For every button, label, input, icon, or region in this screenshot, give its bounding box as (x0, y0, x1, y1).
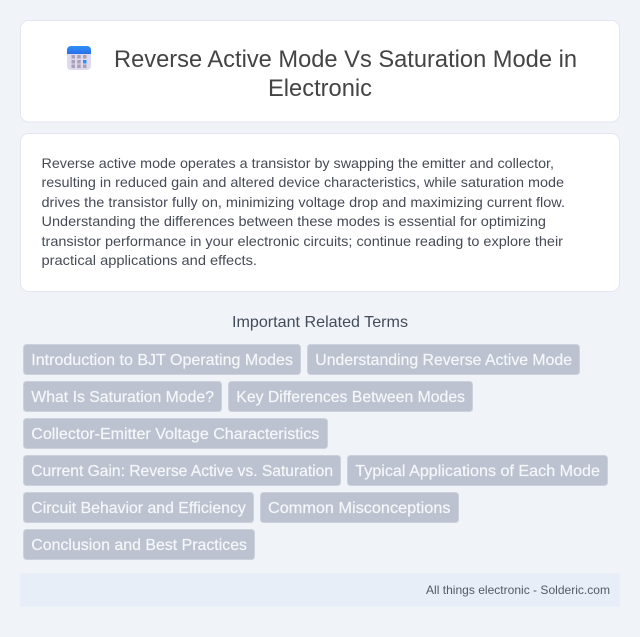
title: Reverse Active Mode Vs Saturation Mode in (114, 46, 577, 73)
tag: reverse active: Understanding Reverse Active Mode (315, 352, 572, 369)
tag: current gain: Current Gain: Reverse Active vs. Saturation (31, 463, 333, 480)
panel: summary text (20, 134, 620, 292)
tag: saturation (24, 382, 222, 412)
summary paragraph: practical applications and effects. (42, 252, 257, 268)
tag: misconceptions (260, 492, 458, 522)
footer (20, 573, 620, 607)
heading: related terms: Important Related Terms (232, 314, 408, 331)
tag: voltage characteristics (24, 418, 328, 448)
summary paragraph: resulting in reduced gain and altered device characteristics, while saturation mode (42, 174, 564, 190)
summary paragraph: transistor performance in your electronic circuits; continue reading to explore their (42, 233, 563, 249)
tag: current gain (24, 456, 340, 486)
header panel (20, 20, 620, 122)
tag: key differences (228, 382, 472, 412)
title (114, 46, 577, 102)
tag: applications: Typical Applications of Each Mode (355, 463, 600, 480)
tag: misconceptions: Common Misconceptions (268, 500, 450, 517)
title: Electronic (268, 75, 372, 102)
summary paragraph: Understanding the differences between these modes is essential for optimizing (42, 213, 546, 229)
panel: term tags (24, 344, 608, 560)
tag: circuit behavior (24, 492, 254, 522)
tag: conclusion: Conclusion and Best Practices (31, 537, 247, 554)
icon: calendar (67, 46, 91, 70)
summary paragraph: drives the transistor fully on, minimizing voltage drop and maximizing current flow. (42, 194, 565, 210)
summary paragraph (42, 155, 565, 268)
tag: introduction: Introduction to BJT Operating Modes (31, 352, 293, 369)
tag: reverse active (308, 344, 580, 374)
summary paragraph: Reverse active mode operates a transistor by swapping the emitter and collector, (42, 155, 554, 171)
tag: introduction (24, 344, 300, 374)
tag: key differences: Key Differences Between Modes (236, 389, 465, 406)
footer: All things electronic - Solderic.com (426, 583, 610, 597)
tag: circuit behavior: Circuit Behavior and Efficiency (31, 500, 246, 517)
tag: conclusion (24, 530, 254, 560)
tag: applications (348, 456, 608, 486)
tag: voltage characteristics: Collector-Emitter Voltage Characteristics (31, 426, 319, 443)
tag: saturation: What Is Saturation Mode? (31, 389, 214, 406)
